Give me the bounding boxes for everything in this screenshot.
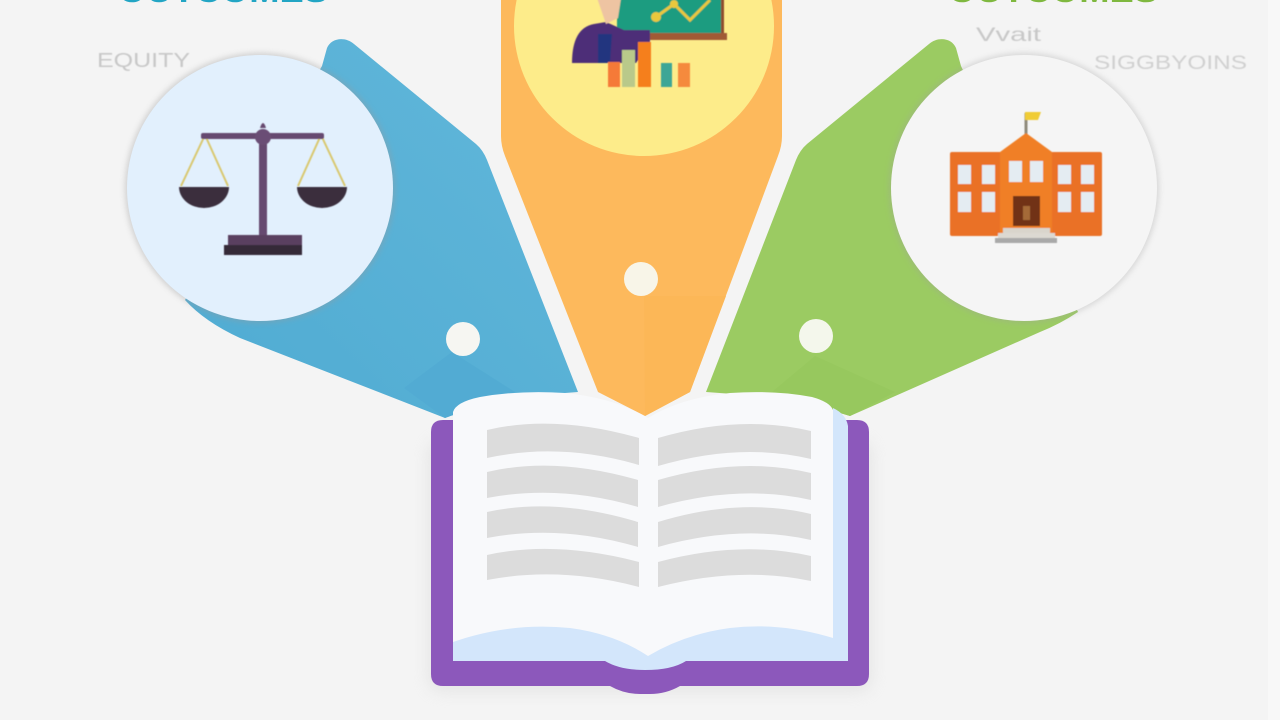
text lines: right page: [658, 424, 811, 587]
dot: orange pointer: [624, 262, 658, 296]
book cover: [431, 420, 869, 694]
icon: open book: [428, 392, 872, 694]
panel: blue pointer: [185, 39, 578, 418]
dot: green pointer: [799, 319, 833, 353]
circle: teaching: [514, 0, 774, 156]
icon: teacher with chart: [572, 0, 727, 87]
icon: school building: [950, 112, 1102, 243]
dot: blue pointer: [446, 322, 480, 356]
label: right caption: SIGGBYOINS: [1094, 53, 1247, 74]
book page edge: [453, 408, 848, 670]
label: equity: EQUITY: [97, 50, 190, 72]
circle: equity: [125, 53, 395, 323]
circle: school: [889, 53, 1159, 323]
book pages: [453, 392, 833, 656]
panel: green pointer: [706, 39, 1078, 416]
panel: orange pointer: [501, 0, 782, 416]
icon: balance scales: [179, 123, 347, 255]
text lines: left page: [487, 424, 639, 587]
label: wait: Vvait: [976, 25, 1042, 46]
